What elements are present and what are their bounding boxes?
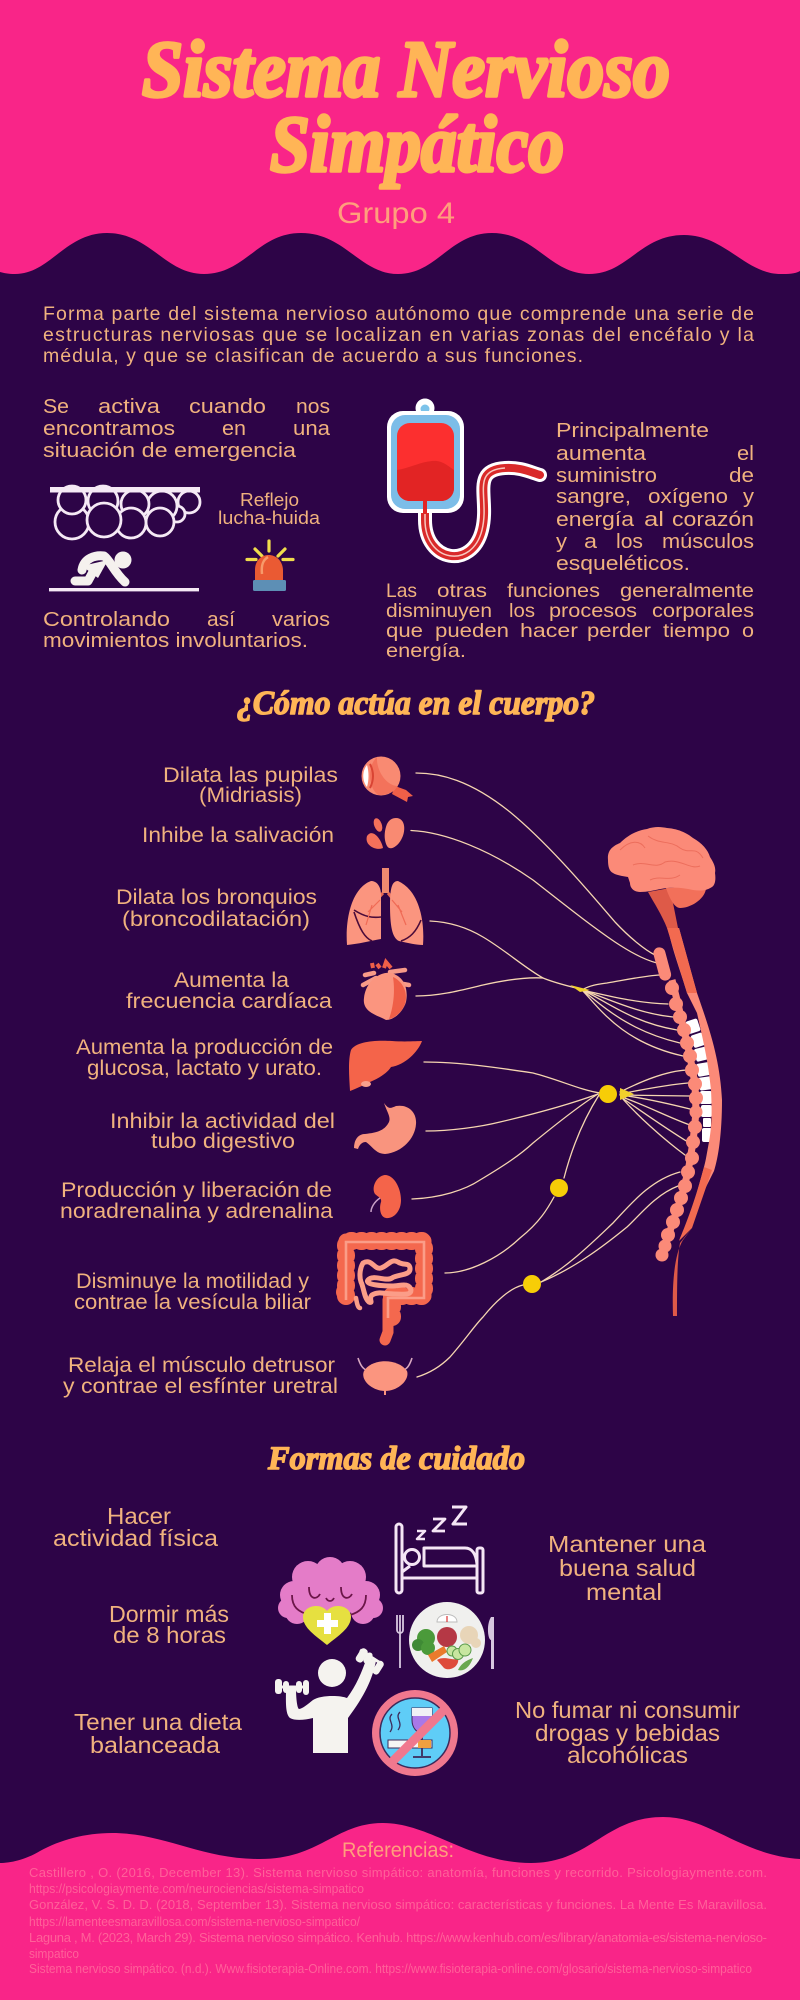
label: Reflejo lucha-huida: lucha-huida [218,508,321,528]
text: other functions: generalmente [620,580,754,602]
heading: care: Formas de cuidado [267,1441,525,1477]
icon: lungs [347,868,423,945]
text: main function: el [737,443,754,465]
icon: eye [362,756,413,802]
organ effect labels [60,764,338,1398]
intro text: estructuras nerviosas que se localizan en varias zonas del encéfalo y la [43,324,754,346]
references text: Laguna , M. (2023, March 29). Sistema nervioso simpático. Kenhub. https://www.kenhub.com/es/library/anatomia-es/sistema-nervioso- [29,1930,767,1945]
title: Sistema Nervioso [142,26,670,114]
care text left: actividad física [53,1525,218,1551]
references text: https://lamenteesmaravillosa.com/sistema-nervioso-simpatico/ [29,1914,360,1929]
organ effect labels: Dilata las pupilas [163,764,338,787]
text: other functions [386,580,754,662]
icon: clouds of smoke [50,486,200,539]
care text right [515,1531,740,1768]
icon: plate of food [397,1602,494,1678]
text: controlling movements: movimientos involuntarios. [43,630,308,652]
text: other functions: corporales [652,600,754,622]
care text left [53,1503,242,1758]
label: Reflejo lucha-huida [218,490,321,528]
care text left: Tener una dieta [74,1709,242,1735]
icon: brain with heart [278,1557,383,1645]
text: other functions: hacer [520,620,579,642]
text: main function: Principalmente [556,420,709,442]
text: other functions: procesos [549,600,637,622]
ganglion nodes [523,1085,617,1293]
text: other functions: perder [587,620,652,642]
text: other functions: o [742,620,754,642]
icon: siren [247,541,293,591]
care text right: alcohólicas [567,1742,688,1768]
icon: bladder [358,1358,412,1395]
text: main function: los [616,531,643,553]
text: other functions: funciones [507,580,600,602]
icon: kidney [371,1175,401,1218]
references text: Castillero , O. (2016, December 13). Sistema nervioso simpático: anatomía, funciones y recorrido. Psicologiaymente.com. [29,1865,767,1880]
text: activation: nos [296,396,330,418]
care text left: Dormir más [109,1601,229,1627]
organ effect labels: (Midriasis) [199,784,302,807]
text: main function: aumenta [556,443,647,465]
organ effect labels: noradrenalina y adrenalina [60,1200,333,1223]
text: activation: en [222,418,246,440]
text: controlling movements [43,609,330,652]
heading: how it acts: ¿Cómo actúa en el cuerpo? [237,685,595,722]
text: other functions: tiempo [663,620,730,642]
organ effect labels: y contrae el esfínter uretral [63,1375,338,1398]
organ effect labels: contrae la vesícula biliar [74,1291,311,1314]
text: other functions: pueden [435,620,509,642]
care text right: mental [586,1579,662,1605]
text: activation: activa [98,396,161,418]
title: Simpático [270,101,564,189]
text: main function: energía [556,509,635,531]
organ effect labels: Aumenta la producción de [76,1036,333,1059]
care text right: No fumar ni consumir [515,1697,740,1723]
organ effect labels: Dilata los bronquios [116,886,317,909]
references text [29,1865,767,1976]
text: main function: al [644,509,664,531]
organ effect labels: Inhibir la actividad del [110,1110,335,1133]
icon: intestines [336,1241,424,1340]
text: activation: situación de emergencia [43,440,297,462]
icon: salivary glands [367,817,404,849]
text: other functions: otras [437,580,487,602]
top wavy banner [0,0,800,274]
spinal cord and brain [608,827,722,1316]
intro text: médula, y que se clasifican de acuerdo a sus funciones. [43,345,583,367]
icon: blood bag [387,398,540,556]
icon: person with dumbbells [275,1647,385,1753]
icon: heart [363,962,409,1020]
organ effect labels: Disminuye la motilidad y [76,1270,310,1293]
icon: no smoking no drinking [372,1690,458,1776]
care text right: Mantener una [548,1531,706,1557]
icon: liver [349,1041,422,1091]
text: activation [43,396,331,462]
text: main function: suministro [556,465,657,487]
organ effect labels: Aumenta la [174,969,289,992]
text: other functions: Las [386,580,417,602]
organ effect labels: Inhibe la salivación [142,824,334,847]
text: main function: corazón [672,509,754,531]
references text: simpatico [29,1946,79,1961]
text: controlling movements: Controlando [43,609,170,631]
text: main function: oxígeno [648,486,728,508]
icon: stomach [354,1103,416,1154]
organ effect labels: glucosa, lactato y urato. [87,1057,322,1080]
sympathetic chain beads [652,946,703,1262]
organ effect labels: tubo digestivo [151,1130,295,1153]
text: main function: sangre, [556,486,631,508]
care text right: buena salud [559,1555,696,1581]
text: main function [556,420,754,575]
text: main function: esqueléticos. [556,553,690,575]
brain [608,827,715,892]
text: main function: y [743,486,754,508]
care text left: balanceada [90,1732,220,1758]
title [142,26,670,189]
references text: González, V. S. D. D. (2018, September 13). Sistema nervioso simpático: características y funciones. La Mente Es Maravillosa. [29,1897,767,1912]
label: Reflejo lucha-huida: Reflejo [240,490,299,510]
organ effect labels: (broncodilatación) [122,908,310,931]
references text: https://psicologiaymente.com/neurociencias/sistema-simpatico [29,1881,364,1896]
text: activation: una [293,418,331,440]
organ effect labels: Producción y liberación de [61,1179,332,1202]
nerve network [411,773,690,1377]
text: controlling movements: así [207,609,235,631]
care text left: de 8 horas [113,1622,226,1648]
text: other functions: los [509,600,535,622]
icon: crouching person [49,552,199,591]
care text right: drogas y bebidas [535,1720,720,1746]
organ effect labels: Relaja el músculo detrusor [68,1354,335,1377]
text: other functions: disminuyen [386,600,492,622]
organ effect labels: frecuencia cardíaca [126,990,332,1013]
text: main function: a [584,531,598,553]
text: activation: Se [43,396,69,418]
text: other functions: que [386,620,423,642]
references heading: Referencias: [342,1839,454,1862]
text: controlling movements: varios [272,609,330,631]
text: main function: y [556,531,567,553]
intro text [43,303,754,367]
text: main function: de [729,465,754,487]
subtitle: Grupo 4: Grupo 4 [337,197,455,230]
intro text: Forma parte del sistema nervioso autónomo que comprende una serie de [43,303,754,325]
white vertebrae [685,1018,713,1142]
text: other functions: energía. [386,640,466,662]
references text: Sistema nervioso simpático. (n.d.). Www.fisioterapia-Online.com. https://www.fisioterapia-online.com/glosario/sistema-nervioso-simpatico [29,1961,752,1976]
care text left: Hacer [107,1503,171,1529]
bottom wavy banner [0,1817,800,2000]
icon: sleeping in bed [396,1507,483,1593]
text: activation: encontramos [43,418,175,440]
text: main function: músculos [662,531,754,553]
text: activation: cuando [189,396,266,418]
